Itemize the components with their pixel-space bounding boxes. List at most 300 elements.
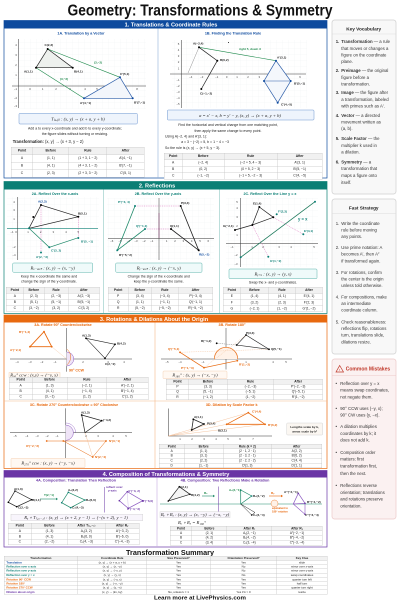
chart: rotate 180: P′(−1,−3) — [181, 366, 194, 370]
table: transformation summary: resize — [298, 590, 306, 594]
panel: fast strategy: 5. — [336, 319, 339, 324]
chart: finding the translation rule: 4 — [178, 48, 180, 52]
formula box 4B: Rᵧ ∘ Rₓ : (x, y) → (x, −y) → (−x, −y) — [160, 512, 230, 518]
chart: rotate 90 ccw: −2 — [40, 360, 44, 364]
table 3B: R — [176, 395, 178, 399]
table 3D: (2 · 2, 2 · 2) — [239, 459, 256, 462]
chart: two reflections make a rotation: 180° rotation — [272, 510, 288, 514]
chart: dilation by scale factor: B(3,1) — [218, 428, 227, 432]
chart: translation by a vector: 3 — [15, 53, 17, 57]
chart: dilation by scale factor: 2 — [191, 437, 193, 441]
chart: rotate 180: −4 — [178, 360, 182, 364]
table: transformation summary: Yes — [176, 578, 181, 581]
table 2C: E′(4, 1) — [303, 294, 314, 298]
table 2B: R — [117, 306, 120, 310]
panel: section 2 reflections — [4, 182, 327, 314]
panel: key vocabulary: 2. — [336, 68, 339, 73]
chart: dilation by scale factor: 6 — [239, 437, 241, 441]
chart: translation then reflection: y-axis — [108, 488, 117, 492]
chart: finding the translation rule: A′(3,1) — [277, 56, 286, 60]
panel: fast strategy: if transformed again. — [341, 258, 380, 263]
chart: translation then reflection: B′(−6,0) — [142, 499, 153, 503]
chart: finding the translation rule: 1 — [178, 66, 180, 70]
panel: common mistakes: then the next. — [340, 471, 366, 476]
table 1A: (2 + 3, 3 − 2) — [78, 171, 97, 175]
chart: translation by a vector: 6 — [109, 87, 111, 91]
panel: section 4 composition: 4. Composition of Transformations & Symmetry — [103, 472, 230, 478]
chart: two reflections make a rotation — [160, 485, 322, 517]
panel: common mistakes: orientation. — [340, 504, 362, 508]
chart: translation by a vector: 0 — [29, 87, 31, 91]
table 3D: C — [171, 459, 173, 462]
table 4B: (4, 2) — [206, 536, 213, 540]
chart: finding the translation rule: B′(5,−1) — [294, 82, 305, 86]
table 4B: C — [180, 541, 182, 544]
panel: key vocabulary: plane. — [341, 59, 353, 64]
text 1B: So the rule is (x, y) → (x + 5, y − 3). — [165, 146, 220, 150]
table 4A: B₁(6, 0) — [81, 534, 92, 538]
table 3A: (−2, 1) — [82, 384, 92, 388]
panel: section 1 translations: 1A. Translation by a Vector — [57, 32, 105, 36]
table 4A: A — [19, 529, 21, 533]
chart: reflect over y equals x: 1 — [251, 245, 253, 249]
panel: common mistakes: • — [336, 406, 338, 411]
chart: rotate 180: Q′(−5,1) — [168, 347, 179, 351]
chart: reflect over y equals x: −3 — [234, 262, 238, 266]
table 2B: (3, 4) — [136, 294, 144, 298]
table 4A: After T₍₂,₋₁₎ — [78, 524, 96, 527]
panel: key vocabulary: — a directed — [354, 113, 381, 118]
chart: rotate 270 ccw: −3 — [35, 434, 39, 438]
chart: two reflections make a rotation: A₁(2,−1) — [229, 488, 241, 492]
table 2A: (3, −2) — [29, 306, 39, 310]
table 4A: (2, −2) — [45, 540, 55, 543]
chart: rotate 270 ccw: −4 — [25, 434, 29, 438]
table 4A: B′(−6, 0) — [116, 534, 129, 538]
table 3B: After — [294, 379, 302, 383]
table 1B: Rule — [247, 154, 254, 158]
table 3A: (1, 2) — [83, 395, 91, 399]
panel: key vocabulary: — the figure after — [354, 90, 389, 95]
chart: translation by a vector: (3,−2) — [60, 77, 68, 81]
table 3D: Rule (k = 2) — [239, 445, 256, 448]
chart: dilation by scale factor — [168, 408, 277, 441]
chart: reflect over y-axis: R(5,−2) — [199, 252, 209, 256]
table 3D: (2 · 3, 2 · 1) — [239, 454, 256, 458]
formula boxes section 2 — [13, 263, 317, 279]
panel: section 3 rotations and dilations — [4, 315, 327, 468]
table 2A: (2, 3) — [30, 294, 38, 298]
table 2B: (−3, 4) — [160, 294, 170, 298]
chart: reflect over y-axis: 1 — [166, 239, 168, 243]
heading: transformation summary: Transformation Summary — [126, 550, 214, 557]
explanation text section 2: Keep the x-coordinate the same and — [21, 274, 77, 278]
chart: dilation by scale factor: B′(6,2) — [268, 423, 277, 427]
table: transformation summary: Yes — [241, 586, 246, 589]
chart: rotate 180: P(3,3) — [246, 331, 254, 335]
table 1A: (2, 3) — [47, 171, 55, 175]
panel: section 3 rotations and dilations: 3A. Rotate 90° Counterclockwise — [34, 323, 92, 327]
chart: translation by a vector: −1 — [14, 87, 18, 91]
chart: rotate 90 ccw: B(4,2) — [117, 342, 126, 346]
table: transformation summary: Reflection over y = x — [6, 573, 35, 577]
panel: common mistakes: • — [336, 381, 338, 386]
table 2C: (1, 4) — [250, 294, 258, 298]
table 3D: D — [171, 464, 173, 467]
table 2A: B′(5, −1) — [78, 300, 90, 304]
panel: fast strategy: rule before moving — [341, 228, 377, 233]
table 3B: (1, −2) — [245, 395, 255, 399]
text 1B: then apply the same change to every point. — [195, 129, 261, 133]
panel: fast strategy: coordinate column. — [341, 307, 378, 312]
chart: reflect over y equals x: 4 — [236, 206, 238, 210]
panel: key vocabulary: — a — [362, 160, 372, 164]
chart: rotate 90 ccw: 90° CCW — [69, 368, 85, 372]
table 1A: (1 + 3, 1 − 2) — [78, 156, 97, 160]
chart: dilation by scale factor: C′(4,4) — [252, 410, 261, 414]
table 1A — [11, 147, 144, 177]
formula box 1B — [167, 110, 314, 120]
panel: key vocabulary: 4. — [336, 113, 339, 118]
panel: section 1 translations: 1B. Finding the Translation Rule — [205, 32, 261, 36]
chart: translation by a vector — [12, 39, 146, 109]
chart: reflect over y equals x: F′(2,3) — [278, 210, 287, 214]
table 1B: (0, 2) — [199, 167, 207, 171]
panel: key vocabulary — [332, 20, 396, 194]
table 4B: (2, 1) — [206, 531, 213, 535]
chart: two reflections make a rotation: A″(−2,−1) — [284, 490, 298, 494]
table 2A: (5, −1) — [51, 300, 61, 304]
table 3A: (1, 3) — [46, 384, 54, 388]
panel: section 2 reflections: 2C. Reflect Over the Line y = x — [244, 192, 297, 196]
chart: rotate 90 ccw: 3 — [107, 360, 109, 364]
table 2B: After — [192, 288, 200, 292]
chart: reflect over x-axis: 2 — [40, 230, 42, 234]
table 4B: B₁(4, −2) — [243, 536, 256, 540]
chart: reflect over y equals x: 5 — [236, 200, 238, 204]
chart: reflect over x-axis: B′(5, −1) — [81, 240, 93, 244]
chart: rotate 180: Q(5,−1) — [271, 347, 282, 351]
table 3D: (2 · 1, 2 · 1) — [239, 449, 256, 453]
panel: common mistakes: ! — [339, 368, 340, 372]
panel: section 1 translations: 1. Translations & Coordinate Rules — [125, 23, 217, 29]
table: transformation summary: Yes if k > 0 — [236, 590, 251, 594]
chart: rotate 180: R(−1,2) — [201, 339, 211, 343]
table 2A: B — [14, 300, 16, 304]
chart: finding the translation rule: −3 — [200, 75, 204, 79]
chart: reflect over y-axis: −1 — [150, 239, 154, 243]
chart: translation by a vector: 7 — [124, 87, 126, 91]
chart: two reflections make a rotation: C″(−3,−4) — [305, 513, 319, 517]
panel: fast strategy: Check reasonableness: — [341, 319, 386, 324]
table 1B — [164, 153, 322, 179]
table: transformation summary: No, unless k = 1 — [168, 590, 189, 594]
panel: key vocabulary: multiplier k used in — [341, 143, 377, 148]
table 4B: A₁(2, −1) — [243, 531, 256, 535]
chart: translation by a vector: 4 — [15, 43, 17, 47]
panel: common mistakes: coordinates by k; it — [340, 431, 377, 436]
chart: reflect over y equals x: −2 — [234, 253, 238, 257]
chart: rotate 270 ccw: N′(2,−4) — [95, 455, 106, 459]
table 3A: C′(1, 2) — [122, 395, 133, 399]
chart: reflect over y equals x: E(1,4) — [253, 202, 261, 206]
table 2A: C — [14, 306, 16, 310]
table 1B: C — [172, 174, 174, 177]
formula box 4A: Rᵧ ∘ T₍₂,₋₁₎ : (x, y) → (x + 2, y − 1) → (−(x + 2), y − 1) — [23, 515, 128, 521]
table: transformation summary: half turn — [297, 582, 307, 585]
panel: key vocabulary: Symmetry — [341, 160, 363, 164]
text 1B: Find the horizontal and vertical change from one matching point, — [178, 123, 278, 127]
panel: section 3 rotations and dilations: 3D. Dilation by Scale Factor k — [206, 403, 258, 407]
chart: reflect over y-axis: Q′(−1,1) — [136, 224, 147, 228]
table 2C: Rule — [278, 288, 285, 292]
chart: rotate 90 ccw: A′(−2,1) — [10, 348, 21, 352]
panel: section 2 reflections: 2B. Reflect Over the y-axis — [135, 192, 181, 196]
chart: finding the translation rule: −1 — [215, 75, 219, 79]
table 3D: (1, −1) — [199, 464, 209, 467]
chart: translation then reflection: reflect over — [106, 485, 123, 489]
table 2C: (1, −2) — [277, 307, 287, 311]
table 3D: Point — [168, 445, 176, 448]
chart: reflect over y-axis: R′(−5,−2) — [119, 253, 132, 257]
panel: fast strategy: 1. — [336, 221, 339, 226]
table: transformation summary: Orientation Preserved? — [227, 556, 260, 560]
table 3D: A — [171, 449, 173, 453]
table 4A: C₁(4, −3) — [80, 540, 93, 543]
panel: fast strategy: reflections flip, rotations — [341, 326, 386, 331]
table 4A — [8, 523, 140, 545]
chart: reflect over y-axis: 5 — [199, 239, 201, 243]
table 3A: (3, −1) — [45, 395, 55, 399]
panel: common mistakes: Reflections reverse — [340, 483, 378, 488]
chart: dilation by scale factor: 7 — [252, 437, 254, 441]
formula box 4B: Rᵧ ∘ Rₓ = R₁₈₀° — [177, 520, 206, 525]
table: transformation summary: Yes — [241, 561, 246, 564]
chart: reflect over y-axis: Q(1,1) — [170, 224, 179, 228]
table 4B: Point — [177, 527, 185, 530]
explanation text section 2: Swap the x- and y-coordinates. — [249, 280, 297, 284]
table: transformation summary: Coordinate Rule — [101, 556, 123, 560]
panel: common mistakes: matters: first — [340, 456, 365, 462]
table 3B: (−2, −3) — [244, 385, 256, 388]
chart: two reflections make a rotation: B(4,2) — [191, 493, 200, 497]
table 3D — [159, 444, 322, 468]
chart: rotate 90 ccw: −3 — [28, 360, 32, 364]
table 2C: (4, 1) — [278, 294, 286, 298]
table: transformation summary: quarter turn left — [292, 578, 312, 581]
chart: finding the translation rule: B(0,2) — [220, 58, 229, 62]
table: transformation summary: Reflection over x-axis — [6, 565, 36, 568]
chart: finding the translation rule: 2 — [178, 60, 180, 64]
table 2B: P — [117, 294, 120, 298]
panel: key vocabulary: Vector — [341, 113, 355, 118]
chart: reflect over y-axis: 3 — [183, 239, 185, 243]
callout: lengths scale: Lengths scale by k, — [290, 425, 319, 429]
chart: reflect over y-axis: −3 — [134, 239, 138, 243]
table 3D: A′(2, 2) — [292, 449, 302, 453]
chart: finding the translation rule: 5 — [178, 42, 180, 46]
table 1A: B′(7, −1) — [119, 164, 132, 167]
chart: rotate 90 ccw: 2 — [82, 360, 84, 364]
chart: finding the translation rule: 1 — [236, 75, 238, 79]
table 1B: (−2, 4) — [198, 161, 208, 164]
table 3D: C′(4, 4) — [292, 459, 302, 462]
panel: key vocabulary: movement written as — [341, 120, 381, 124]
table 2A: C′(3, 2) — [78, 306, 89, 310]
chart: translation then reflection: C′(−4,−3) — [127, 507, 140, 511]
table 2B: Rule — [162, 288, 169, 292]
chart: finding the translation rule: A(−2,4) — [193, 42, 203, 46]
table 2C: (−2, 1) — [249, 307, 259, 311]
panel: key vocabulary: Image — [341, 90, 354, 95]
chart: reflect over x-axis: 4 — [13, 200, 15, 204]
panel: section 3 rotations and dilations: 3B. Rotate 180° — [219, 323, 246, 327]
panel: section 3 rotations and dilations: 3. Rotations & Dilations About the Origin — [100, 317, 209, 323]
chart: finding the translation rule: −1 — [176, 78, 180, 82]
panel: key vocabulary: a dilation. — [341, 150, 360, 154]
chart: translation by a vector: 1 — [15, 73, 17, 77]
chart: rotate 270 ccw: 5 — [125, 434, 127, 438]
chart: two reflections make a rotation: B₁(4,−2) — [253, 494, 265, 498]
table 2A: Rule — [53, 288, 60, 292]
table 3B — [166, 379, 322, 400]
chart: rotate 270 ccw — [10, 408, 132, 459]
chart: dilation by scale factor: 1 — [179, 437, 181, 441]
formula box 1B: a = x′ − x, b = y′ − y, (x, y) → (x + a, y + b) — [199, 113, 281, 119]
chart: reflect over y equals x: E′(4,1) — [304, 229, 313, 233]
panel: key vocabulary: maps a figure onto — [341, 173, 378, 178]
table 3B: Before — [202, 379, 213, 383]
chart: reflect over y equals x: 5 — [313, 245, 315, 249]
chart: reflect over y-axis: −6 — [110, 239, 114, 243]
panel: common mistakes: Reflection over y = x — [340, 381, 380, 386]
chart: translation by a vector: −2 — [14, 96, 18, 100]
panel: key vocabulary: transformation. — [341, 82, 370, 86]
formula boxes section 2: Rₓ₋ₐₓᵢₛ : (x, y) → (x, −y) — [30, 265, 75, 271]
table 3A: Before — [45, 378, 55, 382]
table 2A: (5, 1) — [30, 300, 38, 304]
table 3A: After — [124, 378, 132, 382]
table 3B: Rule — [247, 379, 254, 383]
table 2A: Point — [11, 288, 19, 292]
formula chips section 3: R₁₈₀° : (x, y) → (−x, −y) — [171, 372, 218, 378]
table: transformation summary: (x, y) → (kx, ky) — [102, 590, 122, 594]
chart: dilation by scale factor: 5 — [227, 437, 229, 441]
table: transformation summary: (x, y) → (y, x) — [104, 573, 121, 577]
panel: fast strategy: becomes A′, then A″ — [341, 252, 380, 257]
table 2C: (2, 3) — [278, 301, 286, 304]
table 3D: B′(6, 2) — [292, 454, 302, 458]
table 2B: Before — [135, 288, 145, 292]
table 1B: B — [172, 167, 174, 171]
callout: lengths scale — [287, 423, 323, 435]
table 3D: D′(1, 3) — [242, 464, 253, 467]
chart: rotate 270 ccw: 3 — [97, 434, 99, 438]
table: transformation summary: Translation — [6, 561, 22, 564]
panel: section 3 rotations and dilations: 3C. Rotate 270° Counterclockwise = 90° Clockwise — [30, 403, 118, 407]
table: transformation summary: Transformation — [30, 556, 51, 560]
table: transformation summary: Rotation 90° CCW — [6, 578, 31, 581]
table 4B: Before — [204, 527, 214, 530]
panel: fast strategy: 2. — [336, 245, 339, 250]
table: transformation summary: mirror over y-axis — [291, 569, 313, 572]
table 2A: Before — [29, 288, 39, 292]
table: transformation summary: Yes — [176, 582, 181, 585]
panel: key vocabulary: figure on the coordinate — [341, 52, 387, 58]
chart: finding the translation rule: −5 — [176, 102, 180, 106]
chart: dilation by scale factor: P(3,4) — [207, 422, 215, 426]
table 2C: Before — [249, 288, 259, 292]
table 1A: C′(5, 1) — [120, 171, 131, 175]
table 1A: B — [21, 164, 23, 167]
chart: reflect over x-axis: −1 — [10, 230, 14, 234]
table 3B: Point — [173, 379, 181, 383]
chart: finding the translation rule: 6 — [299, 75, 301, 79]
chart: translation then reflection: A′(−3, 2) — [128, 489, 140, 493]
table 2A: After — [80, 288, 88, 292]
text 1A: Transformation: (x, y) → (x + 3, y − 2) — [13, 139, 84, 144]
chart: finding the translation rule: 3 — [259, 75, 261, 79]
chart: translation by a vector: C′(5,1) — [120, 72, 129, 76]
chart: rotate 270 ccw: 4 — [112, 434, 114, 438]
formula boxes section 2: Rᵧ₌ₓ : (x, y) → (y, x) — [254, 272, 292, 278]
table 2C: After — [305, 288, 313, 292]
chart: reflect over y-axis: −5 — [118, 239, 122, 243]
chart: reflect over x-axis: 4 — [65, 230, 67, 234]
chart: reflect over y equals x — [223, 198, 318, 267]
table 2A: A — [14, 294, 16, 298]
chart: reflect over x-axis — [7, 197, 99, 260]
table: transformation summary — [4, 556, 327, 594]
chart: finding the translation rule: right 5, down 3 — [239, 47, 261, 51]
chart: two reflections make a rotation: B″(−4,−2) — [307, 500, 321, 504]
table 2A — [6, 287, 100, 311]
panel: fast strategy: Write the coordinate — [341, 221, 380, 226]
table 4A: After Rᵧ — [116, 524, 129, 527]
text 1A — [13, 126, 122, 144]
table: transformation summary: Reflection over y-axis — [6, 569, 36, 572]
table 3B: (3, 3) — [204, 385, 212, 388]
table 1B: A — [172, 161, 174, 164]
formula box 1A — [19, 113, 137, 124]
table 1B: (0 + 5, 2 − 3) — [241, 167, 260, 171]
table 4B: B — [180, 536, 182, 540]
table: transformation summary: Rotation 270° CCW — [6, 586, 33, 589]
table 2B: Q — [117, 300, 120, 304]
panel: fast strategy: Fast Strategy — [349, 206, 379, 210]
chart: finding the translation rule: 2 — [247, 75, 249, 79]
chart: reflect over y-axis — [107, 198, 214, 260]
chart: reflect over x-axis: 3 — [53, 230, 55, 234]
chart: rotate 270 ccw: N′(3,−1) — [109, 439, 120, 443]
chart: reflect over y equals x: 3 — [278, 245, 280, 249]
table: transformation summary: (x, y) → (x, −y) — [103, 565, 122, 568]
chart: translation then reflection: C(2,−3) — [18, 506, 28, 510]
chart: two reflections make a rotation: equivalent to — [272, 506, 288, 510]
table 4A: (4, 1) — [46, 534, 54, 538]
table 4B: C″(−3, −4) — [290, 541, 304, 544]
chart: reflect over x-axis: A(2,3) — [38, 200, 47, 204]
panel: common mistakes: orientation; translations — [340, 490, 385, 495]
chart: reflect over y-axis: 2 — [174, 239, 176, 243]
panel: common mistakes: transformation first, — [340, 464, 377, 468]
chart: reflect over x-axis: 5 — [78, 230, 80, 234]
table 2C: (3, 2) — [250, 301, 258, 304]
chart: rotate 270 ccw: A(1,3) — [81, 410, 90, 414]
table 1A: (4, 1) — [47, 164, 55, 167]
chart: rotate 180: 1 — [245, 360, 247, 364]
table 3D: D′(1, 1) — [292, 464, 302, 467]
